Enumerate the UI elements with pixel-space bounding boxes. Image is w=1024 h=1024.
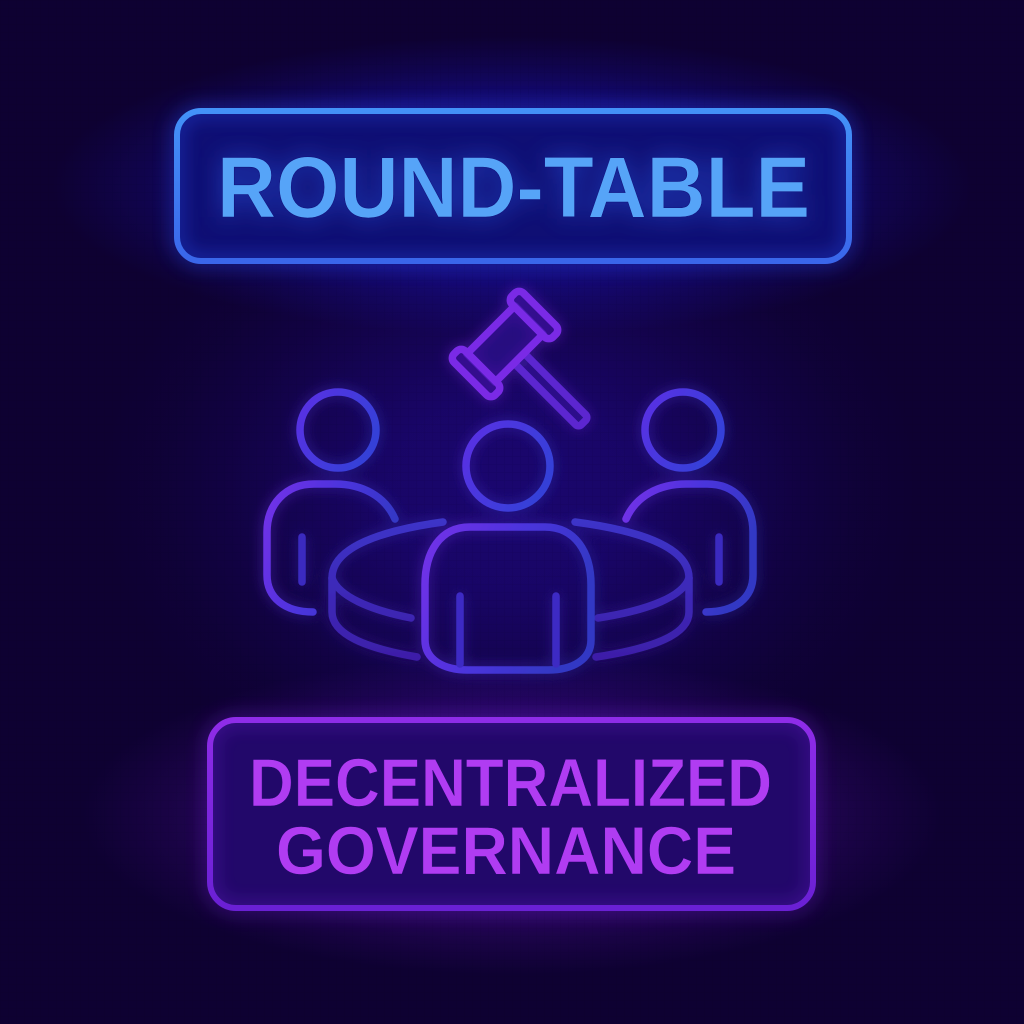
icon: left person xyxy=(267,392,395,612)
icon: gavel xyxy=(450,289,618,457)
banner glow and frame xyxy=(210,720,813,908)
text glow: round-table: ROUND-TABLE xyxy=(217,140,810,236)
icon: round table xyxy=(332,522,689,657)
heading: decentralized governance: DECENTRALIZED xyxy=(249,745,772,821)
illustration: round table meeting xyxy=(267,289,753,670)
panel: decentralized governance banner xyxy=(210,720,813,908)
heading: round-table: ROUND-TABLE xyxy=(217,140,810,236)
icon: center person xyxy=(425,424,591,670)
icon: right person xyxy=(626,392,753,612)
banner glow and frame xyxy=(177,111,849,261)
panel: round-table banner xyxy=(177,111,849,261)
heading: decentralized governance xyxy=(249,745,772,889)
heading: decentralized governance: GOVERNANCE xyxy=(276,813,736,889)
